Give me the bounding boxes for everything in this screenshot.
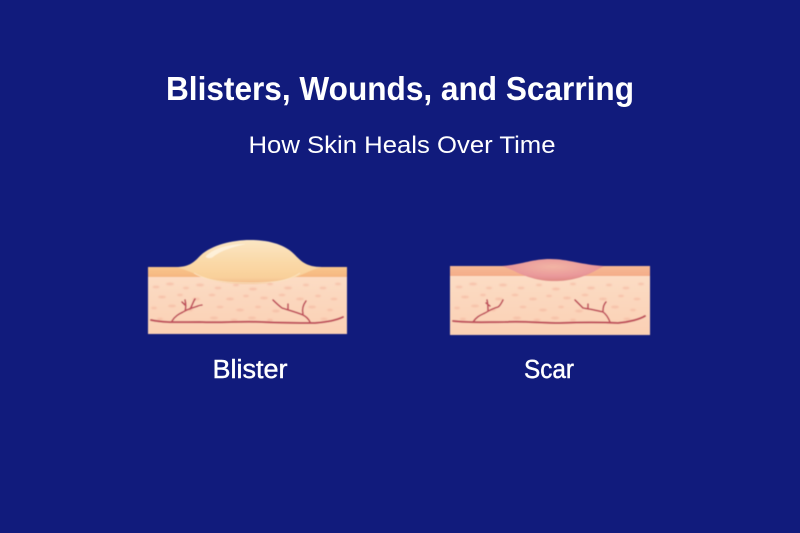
dermis layer [450,276,650,335]
panel: blister illustration [148,240,347,334]
dermis layer [148,276,347,334]
label: scar: Scar [524,356,574,384]
blister highlight [206,244,246,258]
pores [454,283,644,321]
blood vessels [151,299,343,323]
subtitle: How Skin Heals Over Time [248,132,556,159]
epidermis layer [148,267,347,277]
panel: scar illustration [450,259,650,335]
epidermis layer [450,266,650,276]
blister dome [176,240,322,284]
blood vessels [453,300,645,323]
pores [151,283,341,321]
scar tissue [502,259,604,281]
title: Blisters, Wounds, and Scarring [166,70,634,107]
label: blister: Blister [212,356,288,384]
blister lower rim [194,273,300,283]
